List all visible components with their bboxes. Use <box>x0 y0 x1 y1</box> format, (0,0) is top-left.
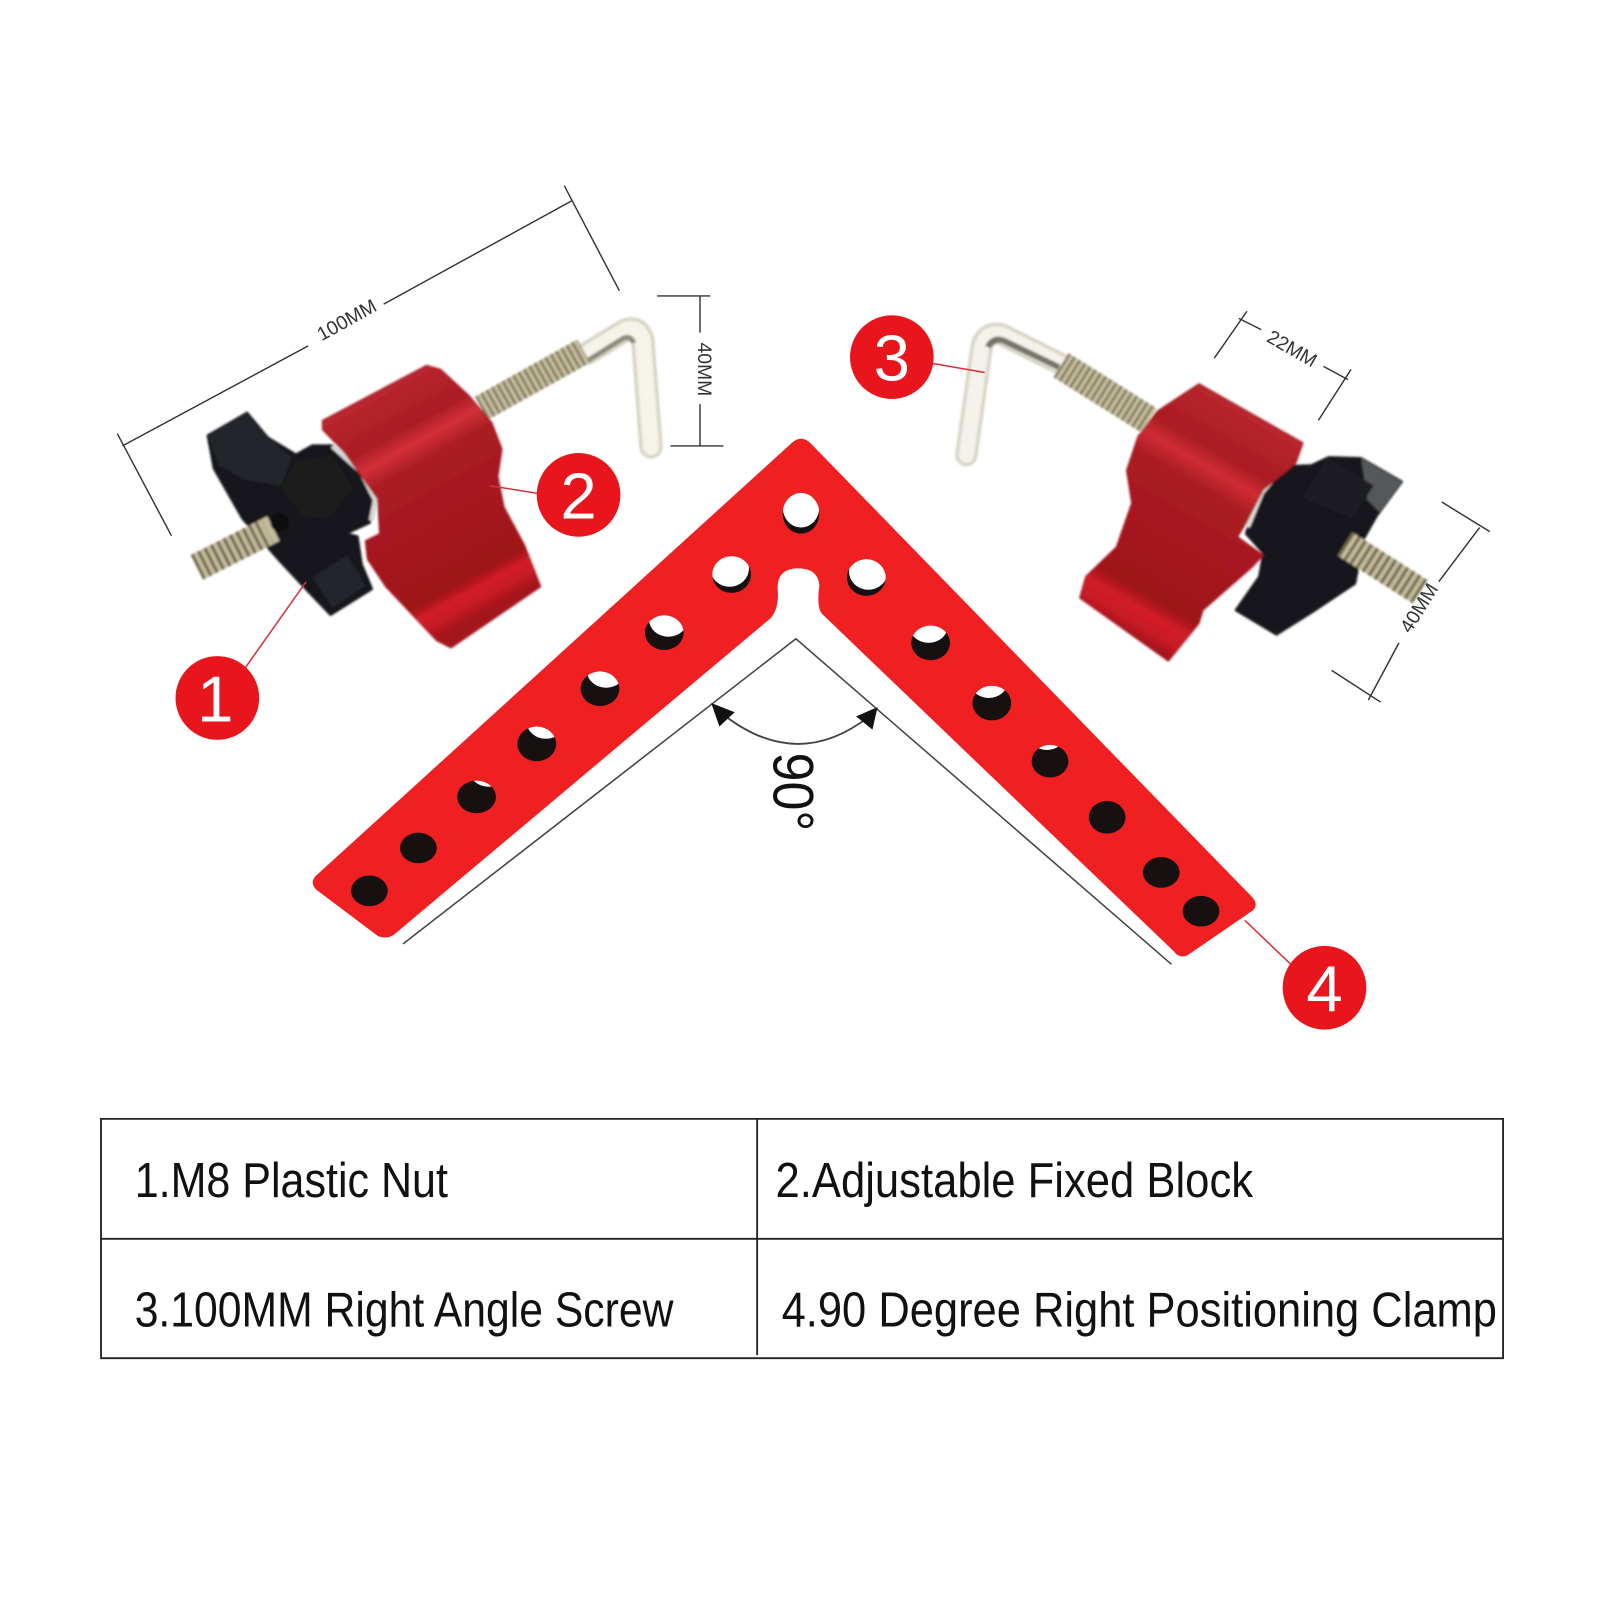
dimension: 100MM: 100MM <box>313 295 381 346</box>
dimension: 22MM: 22MM <box>1263 326 1321 372</box>
right long screw with hook <box>966 334 1149 455</box>
hole row <box>351 487 1219 927</box>
right plastic knob <box>1236 457 1402 635</box>
callout 2: 2 <box>560 459 597 532</box>
dimension: 40MM right <box>1332 502 1490 702</box>
callout 1 <box>176 582 306 740</box>
left clamp assembly <box>197 329 651 648</box>
right short screw <box>1345 544 1420 592</box>
callout 4: 4 <box>1306 952 1343 1025</box>
table cell 4: 4.90 Degree Right Positioning Clamp <box>782 1284 1497 1338</box>
left plastic knob <box>208 413 376 614</box>
callout 4 <box>1245 920 1366 1030</box>
callout 2 <box>490 453 620 537</box>
table cell 1: 1.M8 Plastic Nut <box>135 1154 448 1208</box>
90 degree label: 90° <box>760 753 824 831</box>
right fixed block <box>1080 384 1303 661</box>
callout 3: 3 <box>874 322 910 395</box>
red angle clamp with holes <box>313 439 1256 956</box>
angle guide lines <box>403 639 1171 964</box>
dimension: 40MM right: 40MM <box>1396 580 1443 637</box>
left long screw with hook <box>482 329 651 447</box>
parts table <box>100 1118 1503 1358</box>
table cell 2: 2.Adjustable Fixed Block <box>776 1154 1254 1208</box>
table grid <box>100 1118 1503 1358</box>
dimension: 40MM hook height <box>657 296 723 446</box>
left fixed block <box>322 365 541 648</box>
right clamp assembly <box>966 334 1420 661</box>
dimension: 40MM hook height: 40MM <box>693 342 715 396</box>
dimension: 22MM <box>1214 311 1351 420</box>
dimension: 100MM <box>117 186 619 536</box>
table cell 3: 3.100MM Right Angle Screw <box>135 1284 674 1338</box>
callout 3 <box>850 315 985 399</box>
90 degree arc with arrows <box>711 703 878 744</box>
callout 1: 1 <box>197 662 233 735</box>
left short screw <box>197 513 289 567</box>
